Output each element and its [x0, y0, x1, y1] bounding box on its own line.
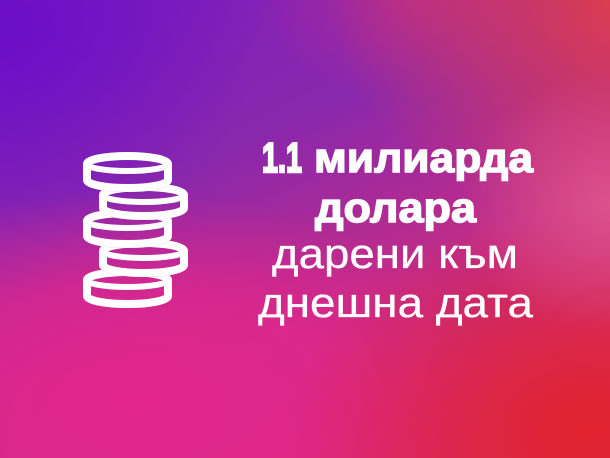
- icon: stack of coins: [87, 156, 184, 304]
- subtext: donated to date: [258, 230, 534, 326]
- subtext: donated to date: дарени към: [272, 230, 518, 277]
- headline: amount: долара: [315, 184, 477, 231]
- headline: amount: [262, 134, 534, 231]
- subtext: donated to date: днешна дата: [258, 279, 534, 326]
- headline: amount: милиарда: [314, 134, 534, 181]
- icon and headline artwork: [83, 142, 534, 326]
- headline: amount: 1.1: [262, 134, 302, 181]
